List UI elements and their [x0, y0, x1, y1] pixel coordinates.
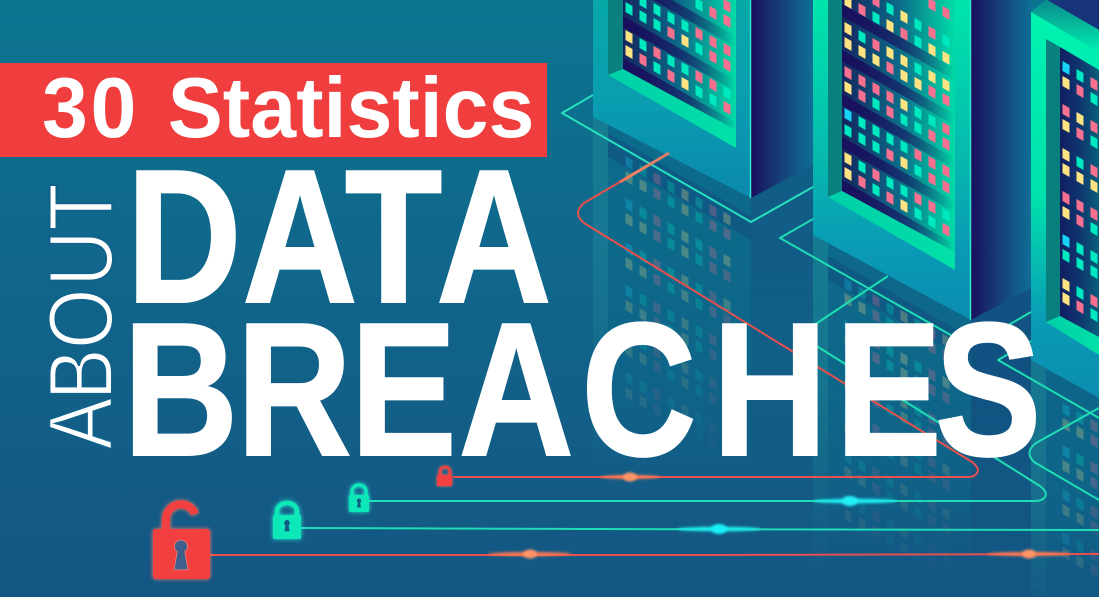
- icon: small teal padlock: [349, 485, 369, 512]
- side wall: [751, 0, 813, 198]
- window wall: [608, 0, 623, 75]
- server floor reflections: [593, 117, 1099, 597]
- frame sill: [608, 69, 736, 148]
- window wall: [1046, 39, 1060, 322]
- orange fade on upper red trace: [620, 153, 669, 182]
- icon: medium teal padlock: [273, 503, 301, 539]
- teal trace 1: [562, 95, 813, 222]
- teal trace 4: [998, 341, 1099, 418]
- screen: [1060, 47, 1099, 338]
- banner: [0, 60, 547, 157]
- glow: red lower left: [488, 550, 572, 558]
- glow: teal lower: [677, 524, 761, 534]
- window wall: [828, 0, 842, 197]
- reflection: server 2: [813, 235, 1031, 546]
- teal trace 5: [1000, 312, 1031, 330]
- server 1: [593, 0, 813, 198]
- red trace lower: [210, 554, 1099, 555]
- teal trace 6: [1029, 408, 1099, 500]
- teal trace 3: [369, 276, 1046, 501]
- teal trace 2: [780, 219, 970, 346]
- heading: DATA: DATA: [126, 131, 552, 343]
- reflection: server 1: [593, 118, 813, 444]
- red trace upper: [453, 153, 978, 477]
- glow: teal upper: [813, 496, 897, 506]
- pillar: [593, 0, 751, 198]
- server 3: [1031, 0, 1099, 398]
- heading: 30 Statistics: Statistics: [168, 60, 534, 155]
- pillar: [1031, 0, 1099, 398]
- pillar: [813, 0, 971, 320]
- side wall: [971, 0, 1031, 320]
- status lights: [626, 0, 730, 115]
- reflection: server 3: [1031, 360, 1099, 597]
- glow: red lower right: [987, 550, 1071, 558]
- screen: [842, 0, 955, 255]
- signal glows: [488, 472, 1071, 558]
- banner bar: [0, 63, 547, 157]
- frame sill: [1046, 316, 1099, 355]
- circuit lines: [210, 95, 1099, 555]
- edge highlight: [970, 0, 972, 320]
- dark bands: [623, 0, 736, 133]
- teal trace 7: [301, 528, 1099, 530]
- top bevel: [1031, 0, 1099, 52]
- icon: tiny red padlock: [437, 467, 452, 486]
- icon: large open red padlock: [153, 504, 210, 579]
- glow: red upper: [600, 472, 660, 482]
- dark bands: [842, 4, 955, 255]
- status lights: [844, 0, 950, 237]
- frame sill: [828, 191, 955, 270]
- heading: 30 Statistics: 30: [42, 60, 136, 155]
- navy top face: [1047, 0, 1099, 30]
- screen: [623, 0, 736, 133]
- heading: BREACHES: BREACHES: [123, 284, 1041, 496]
- vertical heading: ABOUT: ABOUT: [30, 183, 131, 449]
- status lights: [1062, 61, 1098, 322]
- edge highlight: [750, 0, 752, 198]
- screen tint: [1060, 47, 1099, 338]
- server 2: [813, 0, 1031, 320]
